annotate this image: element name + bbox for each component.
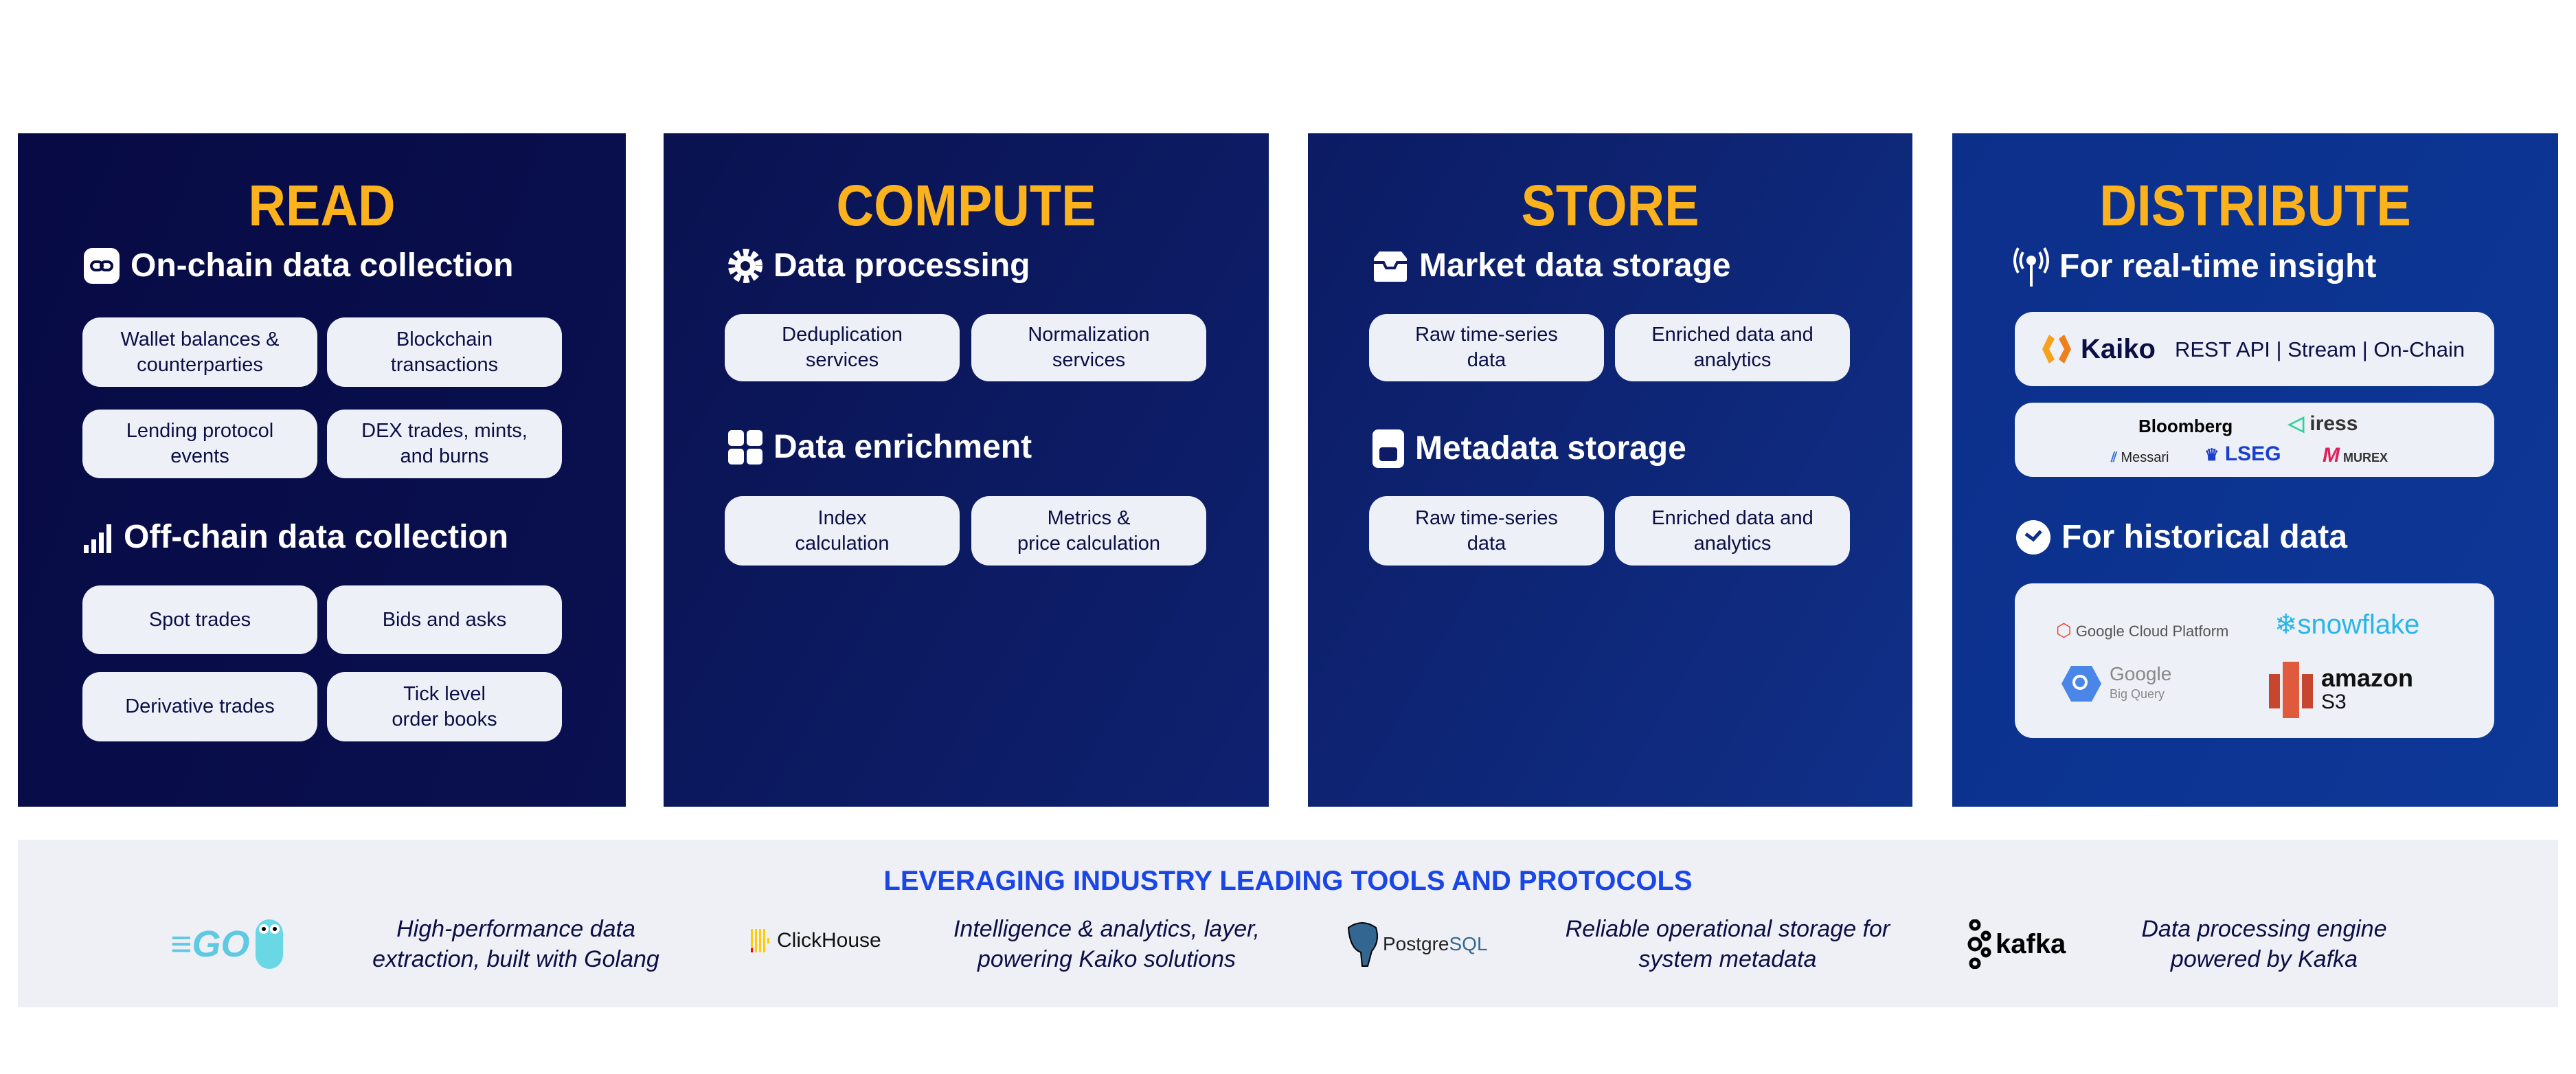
box: cloud logos: S3 <box>2321 690 2347 713</box>
heading: data enrichment: Data enrichment <box>773 429 1032 465</box>
text: go: High-performance data <box>396 916 635 942</box>
box: Enriched data and <box>1651 507 1814 529</box>
box: partner logos: M MUREX <box>2323 444 2388 467</box>
icon: postgresql: PostgreSQL <box>1383 933 1488 954</box>
box: services <box>1052 349 1125 371</box>
text: kafka <box>2141 916 2387 972</box>
box: cloud logos: ❄snowflake <box>2274 609 2419 640</box>
title: READ: READ <box>248 173 396 238</box>
box: data <box>1467 532 1506 554</box>
panel: tools band <box>18 840 2558 1007</box>
heading: tools: LEVERAGING INDUSTRY LEADING TOOLS AND PROTOCOLS <box>883 866 1693 896</box>
box <box>1615 314 1850 381</box>
box: partner logos: ♛ LSEG <box>2204 443 2281 465</box>
box: analytics <box>1694 532 1771 554</box>
box <box>327 317 562 387</box>
icon: postgresql <box>1348 922 1488 967</box>
box <box>1615 496 1850 566</box>
panel: distribute <box>1952 133 2558 807</box>
box: kaiko: REST API | Stream | On-Chain <box>2175 337 2465 361</box>
box: cloud logos: ⬡ Google Cloud Platform <box>2056 620 2228 640</box>
heading: off-chain: Off-chain data collection <box>124 519 508 555</box>
heading: on-chain: On-chain data collection <box>131 247 513 284</box>
box <box>1369 314 1604 381</box>
box: Spot trades <box>149 609 251 631</box>
box: services <box>806 349 879 371</box>
box <box>327 410 562 478</box>
box <box>971 314 1206 381</box>
box: kaiko <box>2015 312 2494 386</box>
box: Wallet balances & <box>120 328 280 350</box>
box: Normalization <box>1028 324 1150 346</box>
box: counterparties <box>137 353 263 375</box>
box: Blockchain <box>396 328 493 350</box>
text: postgresql <box>1566 916 1890 972</box>
box: Derivative trades <box>125 695 275 717</box>
box: partner logos: ◁ iress <box>2288 412 2358 435</box>
box: cloud logos <box>2015 583 2494 738</box>
box: Raw time-series <box>1415 324 1558 346</box>
box: Index <box>818 507 866 529</box>
box: cloud logos: Big Query <box>2110 687 2165 701</box>
box: transactions <box>391 353 498 375</box>
title: STORE: STORE <box>1521 173 1699 238</box>
heading: real-time: For real-time insight <box>2059 248 2376 284</box>
box <box>327 585 562 654</box>
box <box>971 496 1206 566</box>
box: cloud logos: amazon <box>2321 664 2413 691</box>
box: Bids and asks <box>383 609 506 631</box>
icon: go: ≡GO <box>170 924 250 965</box>
box <box>725 496 960 566</box>
heading: historical: For historical data <box>2061 519 2347 555</box>
box: partner logos: ⫽ Messari <box>2111 450 2169 465</box>
box: order books <box>392 708 497 730</box>
box: events <box>170 445 229 467</box>
icon: go <box>170 919 283 969</box>
heading: data processing: Data processing <box>773 247 1030 284</box>
heading: metadata storage: Metadata storage <box>1415 430 1686 467</box>
text: go: extraction, built with Golang <box>372 946 659 972</box>
panel: read <box>18 133 626 807</box>
box: cloud logos: Google <box>2110 662 2171 684</box>
title: DISTRIBUTE: DISTRIBUTE <box>2099 173 2411 238</box>
text: clickhouse: powering Kaiko solutions <box>978 946 1236 972</box>
box <box>725 314 960 381</box>
box: Enriched data and <box>1651 324 1814 346</box>
box: Lending protocol <box>126 420 273 442</box>
panel: store <box>1308 133 1912 807</box>
box: Deduplication <box>782 324 903 346</box>
box <box>327 672 562 741</box>
icon: kafka <box>1967 919 2066 969</box>
text: postgresql: system metadata <box>1639 946 1816 972</box>
text: clickhouse <box>953 916 1260 972</box>
box <box>82 585 317 654</box>
box: calculation <box>795 532 890 554</box>
box: Raw time-series <box>1415 507 1558 529</box>
box <box>82 317 317 387</box>
box: and burns <box>400 445 489 467</box>
box: price calculation <box>1017 532 1160 554</box>
text: kafka: Data processing engine <box>2141 916 2387 942</box>
heading: market data storage: Market data storage <box>1419 247 1731 284</box>
icon: clickhouse: ClickHouse <box>777 929 881 952</box>
title: COMPUTE: COMPUTE <box>837 173 1096 238</box>
box: DEX trades, mints, <box>361 420 528 442</box>
box: partner logos: Bloomberg <box>2138 416 2233 436</box>
text: go <box>372 916 659 972</box>
box: kaiko: Kaiko <box>2081 334 2156 364</box>
box <box>1369 496 1604 566</box>
box: analytics <box>1694 349 1771 371</box>
box: partner logos <box>2015 403 2494 477</box>
text: clickhouse: Intelligence & analytics, layer, <box>953 916 1260 942</box>
panel: compute <box>664 133 1269 807</box>
box: Tick level <box>403 683 486 705</box>
box <box>82 410 317 478</box>
box: data <box>1467 349 1506 371</box>
text: postgresql: Reliable operational storage for <box>1566 916 1890 942</box>
box: Metrics & <box>1048 507 1130 529</box>
text: kafka: powered by Kafka <box>2171 946 2358 972</box>
icon: kafka: kafka <box>1996 929 2066 959</box>
box <box>82 672 317 741</box>
